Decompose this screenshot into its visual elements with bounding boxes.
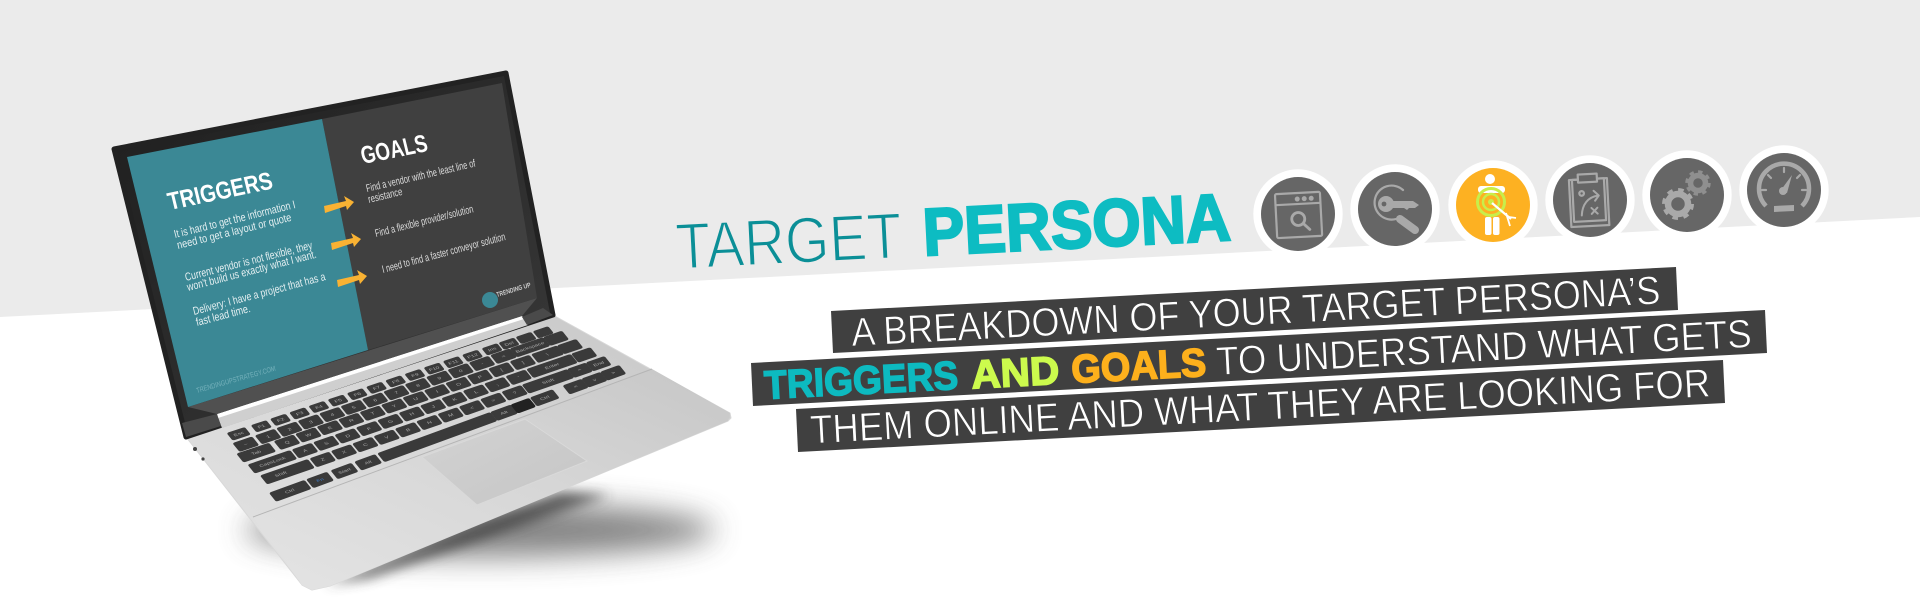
keyboard: [	[500, 368, 505, 372]
keyboard: Esc	[233, 431, 246, 438]
keyboard: F	[366, 427, 373, 432]
keyboard: N	[426, 420, 434, 426]
goals list: resistance	[367, 186, 404, 206]
keyboard: Y	[391, 404, 399, 409]
keyboard: 6	[372, 398, 379, 403]
keyboard: >	[491, 398, 497, 403]
keyboard: ]	[521, 361, 526, 365]
triggers list: Current vendor is not flexible, they	[184, 240, 314, 284]
banner line 1: A BREAKDOWN OF YOUR TARGET PERSONA’S	[850, 269, 1661, 355]
keyboard: >	[610, 371, 617, 376]
keyboard: Ins	[487, 347, 498, 353]
highlight: and: AND	[970, 349, 1060, 397]
keyboard: T	[370, 411, 377, 416]
keyboard: F7	[372, 385, 382, 391]
arrow 1	[324, 196, 354, 213]
keyboard: Ctrl	[284, 488, 296, 495]
arrow 3	[337, 270, 367, 287]
keyboard: 4	[330, 413, 336, 418]
icon: keyword search	[1350, 164, 1440, 254]
title	[674, 180, 1232, 283]
keyboard: =	[501, 354, 507, 359]
keyboard: ?	[512, 391, 518, 396]
keyboard: U	[413, 397, 420, 402]
keyboard: <	[573, 385, 579, 390]
triggers list	[173, 199, 327, 329]
keyboard: Tab	[250, 450, 263, 457]
right hinge	[522, 308, 553, 325]
triggers list: need to get a layout or quote	[176, 212, 293, 252]
goals list: Find a vendor with the least line of	[365, 157, 477, 195]
triggers list: won't build us exactly what I want.	[185, 249, 318, 294]
silver hinge strip	[217, 317, 528, 428]
highlight: triggers: TRIGGERS	[763, 354, 959, 408]
keyboard: G	[387, 419, 395, 424]
keyboard: 2	[287, 427, 293, 432]
keyboard: Shift	[541, 378, 556, 386]
subtitle banner	[751, 267, 1767, 452]
keyboard: CapsLock	[259, 456, 287, 469]
keyboard: H	[409, 412, 416, 417]
keyboard: F9	[411, 373, 420, 379]
keyboard: V	[384, 435, 391, 440]
keyboard: F10	[428, 366, 441, 373]
keyboard: B	[405, 428, 412, 433]
keyboard: 3	[308, 420, 315, 425]
keyboard: F5	[334, 398, 344, 404]
keyboard: E	[327, 425, 334, 431]
keyboard: F12	[467, 353, 480, 360]
keyboard: 9	[437, 376, 443, 381]
keyboard: R	[348, 418, 356, 424]
laptop lid	[114, 73, 553, 437]
laptop base	[186, 315, 731, 590]
triggers list: It is hard to get the information I	[173, 199, 297, 241]
keyboard: Alt	[500, 410, 510, 416]
keyboard: M	[447, 413, 455, 418]
keyboard: F8	[391, 379, 401, 385]
goals list: I need to find a faster conveyor solution	[381, 231, 507, 276]
arrow 2	[331, 233, 361, 250]
keyboard: <	[469, 406, 476, 411]
keyboard: D	[345, 434, 352, 439]
keyboard	[223, 316, 632, 501]
screen: teal triggers panel	[127, 119, 368, 407]
title: persona: PERSONA	[921, 180, 1232, 270]
line 2 remainder: TO UNDERSTAND WHAT GETS	[1215, 312, 1753, 384]
keyboard: \	[545, 352, 551, 357]
keyboard: O	[455, 382, 463, 387]
goals list: Find a flexible provider/solution	[374, 203, 475, 240]
keyboard: I	[435, 390, 440, 394]
keyboard: W	[305, 433, 313, 438]
keyboard: Z	[320, 457, 326, 462]
keyboard: 5	[351, 405, 357, 410]
keyboard: X	[341, 450, 349, 455]
highlight: goals: GOALS	[1070, 341, 1207, 392]
keyboard: '	[517, 376, 521, 380]
keyboard: Start	[337, 467, 353, 476]
keyboard: Shift	[274, 470, 289, 478]
keyboard: Enter	[544, 362, 561, 371]
keyboard: J	[431, 405, 437, 410]
screen: dark goals panel	[322, 83, 537, 350]
keyboard: Alt	[364, 460, 374, 466]
keyboard: 7	[394, 391, 400, 396]
triggers list: fast lead time.	[195, 303, 252, 329]
keyboard: Fn	[316, 477, 325, 484]
keyboard: Ctrl	[539, 395, 551, 402]
keyboard: S	[323, 441, 331, 446]
keyboard: 8	[415, 383, 422, 388]
trackpad	[422, 419, 587, 505]
keyboard: K	[452, 397, 459, 402]
banner line 2	[751, 310, 1767, 408]
keyboard: F1	[257, 424, 267, 430]
keyboard: 1	[265, 435, 272, 439]
keyboard: F11	[448, 359, 460, 366]
keyboard: 0	[458, 369, 464, 374]
icon: target persona, highlighted	[1448, 160, 1538, 250]
keyboard: v	[592, 378, 598, 383]
keyboard: -	[480, 362, 485, 366]
keyboard: End	[592, 361, 606, 368]
icon row	[1253, 145, 1829, 259]
keyboard: ^	[578, 368, 584, 373]
laptop mockup	[114, 73, 731, 590]
icon: gears	[1642, 150, 1732, 240]
keyboard: Q	[284, 440, 291, 445]
keyboard: ;	[495, 383, 500, 387]
keyboard: L	[473, 390, 480, 395]
keyboard: F4	[315, 405, 324, 411]
icon: speedometer	[1739, 145, 1829, 235]
banner line 3: THEM ONLINE AND WHAT THEY ARE LOOKING FOR	[809, 361, 1711, 452]
keyboard: Del	[504, 341, 515, 347]
keyboard: Backspace	[515, 341, 546, 354]
keyboard: A	[302, 448, 309, 454]
goals list	[365, 157, 507, 276]
triggers heading: TRIGGERS	[165, 168, 275, 216]
keyboard: F6	[353, 392, 363, 398]
icon: strategy clipboard	[1545, 155, 1635, 245]
screen logo	[482, 282, 532, 308]
keyboard: C	[362, 442, 370, 448]
icon: browser search	[1253, 169, 1343, 259]
keyboard: F2	[276, 417, 286, 423]
screen logo: TRENDING UP	[496, 282, 532, 299]
laptop shadow	[245, 492, 715, 585]
background: slanted grey panel	[0, 0, 1920, 317]
title: target: TARGET	[674, 199, 903, 283]
left hinge	[182, 414, 221, 437]
screen footer url: TRENDINGUPSTRATEGY.COM	[195, 364, 276, 395]
lower bezel	[188, 298, 537, 414]
keyboard: ~	[243, 442, 249, 447]
triggers list: Delivery: I have a project that has a	[192, 271, 327, 318]
keyboard: F3	[295, 411, 305, 417]
keyboard: P	[477, 375, 484, 380]
goals heading: GOALS	[358, 130, 430, 170]
